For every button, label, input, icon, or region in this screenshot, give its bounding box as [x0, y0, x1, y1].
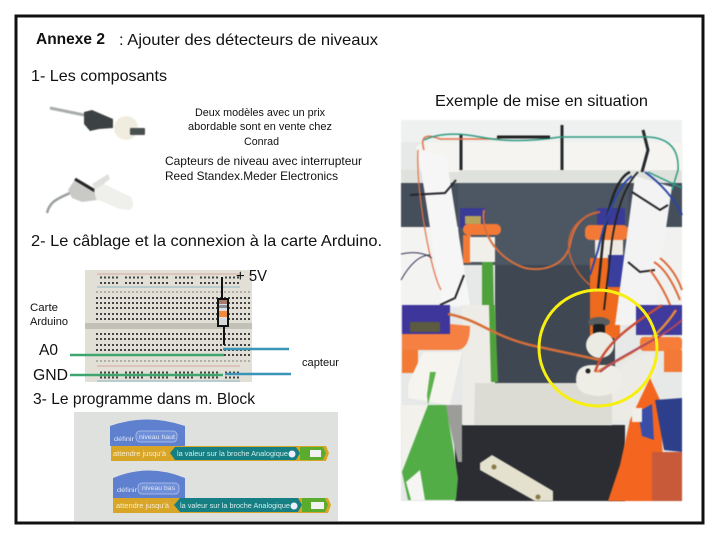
- level sensor in place: [576, 317, 622, 396]
- heading: cablage: 2- Le câblage et la connexion à la carte Arduino.: [31, 233, 382, 250]
- text: sensor reference: Capteurs de niveau avec interrupteur: [165, 154, 362, 168]
- title: : Ajouter des détecteurs de niveaux: [119, 32, 378, 49]
- label: carte Arduino: [30, 302, 68, 328]
- photo: situation example: [401, 120, 682, 501]
- text: sensor reference: [165, 154, 362, 183]
- block: niveau haut: définir: [114, 436, 135, 443]
- beige slab: [474, 383, 612, 425]
- block: niveau bas: niveau bas: [142, 485, 176, 492]
- label: GND: GND: [33, 367, 68, 384]
- left servo front: [402, 305, 470, 373]
- label: A0: A0: [39, 342, 58, 359]
- block: niveau bas: attendre jusqu'à: [116, 503, 169, 510]
- label: carte Arduino: Carte: [30, 302, 58, 314]
- label: 5V: + 5V: [236, 268, 267, 285]
- heading: les composants: 1- Les composants: [31, 68, 167, 85]
- callout: yellow circle: [539, 290, 657, 406]
- cable ties and wires: [401, 125, 682, 310]
- text: models description: abordable sont en vente chez: [188, 121, 332, 133]
- icon: top level sensor: [50, 108, 145, 140]
- wires: [70, 349, 291, 375]
- photo background: [401, 120, 682, 501]
- text: sensor reference: Reed Standex.Meder Electronics: [165, 169, 338, 183]
- resistor: [218, 277, 228, 345]
- block: niveau bas: la valeur sur la broche Analogique: [180, 503, 290, 510]
- text: models description: Conrad: [244, 136, 279, 148]
- mBlock program screenshot: [74, 412, 338, 521]
- block: niveau haut: la valeur sur la broche Analogique: [177, 451, 288, 458]
- label: carte Arduino: Arduino: [30, 316, 68, 328]
- left servo back: [460, 208, 501, 263]
- wiring diagram: [30, 268, 339, 384]
- sensor wires: [448, 305, 682, 372]
- text: models description: [188, 107, 332, 148]
- block: niveau haut: niveau haut: [139, 434, 175, 441]
- block: niveau bas: [113, 470, 331, 513]
- heading: programme: 3- Le programme dans m. Block: [33, 391, 256, 408]
- title: [36, 31, 378, 49]
- green panel and white wall: [462, 262, 498, 425]
- icon: bottom level sensor: [47, 174, 133, 213]
- block: niveau bas: définir: [117, 487, 138, 494]
- photo objects: [401, 125, 682, 501]
- left white slab and green panel: [401, 352, 462, 500]
- heading: exemple: Exemple de mise en situation: [435, 93, 648, 110]
- white frame: [416, 142, 682, 325]
- right servo back and orange bar: [585, 208, 628, 338]
- block: niveau haut: [110, 420, 329, 461]
- block: niveau haut: attendre jusqu'à: [113, 451, 166, 458]
- breadboard: [85, 270, 252, 382]
- wood bracket: [480, 455, 553, 501]
- title: Annexe 2: [36, 31, 105, 48]
- text: models description: Deux modèles avec un prix: [195, 107, 325, 119]
- right servo front: [636, 305, 682, 372]
- label: capteur: capteur: [302, 357, 339, 369]
- right wall and orange corner mount: [608, 352, 682, 501]
